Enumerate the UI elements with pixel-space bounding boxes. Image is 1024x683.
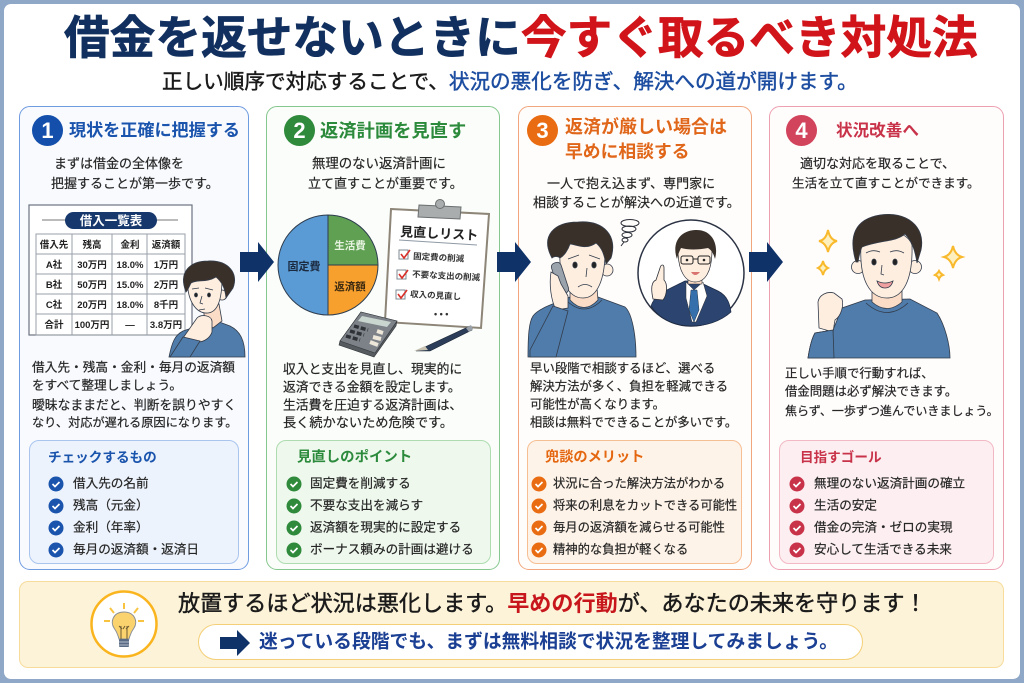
text: 返済できる金額を設定します。 — [283, 379, 461, 394]
step 4 goals — [779, 440, 994, 564]
text: 毎月の返済額を減らせる可能性 — [553, 521, 725, 535]
text: 無理のない返済計画の確立 — [814, 476, 965, 490]
table: borrowing list: — — [125, 320, 135, 331]
step 2 badge: 2 — [293, 118, 306, 143]
step 4 badge — [786, 115, 817, 146]
arrow: step 1 to 2 — [240, 242, 274, 282]
table: borrowing list: 18.0% — [117, 260, 144, 271]
text: 把握することが第一歩です。 — [51, 176, 219, 191]
text: 早めに相談する — [565, 141, 689, 161]
table: borrowing list: 借入一覧表 — [80, 213, 143, 228]
pen — [414, 325, 473, 351]
step 2 points — [276, 440, 491, 564]
text: 無理のない返済計画に — [312, 156, 446, 171]
table: borrowing list: 18.0% — [117, 300, 144, 311]
step 3 intro — [533, 176, 740, 210]
step 1 badge: 1 — [41, 118, 54, 143]
step 2 body — [283, 361, 462, 430]
text: 返済額を現実的に設定する — [310, 520, 461, 534]
table: borrowing list: 合計 — [44, 319, 64, 331]
icon: check marks step 2 — [286, 476, 302, 558]
person: worried man on the phone — [528, 222, 636, 357]
table: borrowing list: 1万円 — [154, 260, 178, 271]
text: 一人で抱え込まず、専門家に — [547, 176, 715, 191]
text: 生活の安定 — [814, 498, 877, 512]
text: 借入先・残高・金利・毎月の返済額 — [32, 360, 235, 374]
text: 可能性が高くなります。 — [530, 398, 665, 412]
banner message: 迷っている段階でも、まずは無料相談で状況を整理してみましょう。 — [259, 631, 838, 652]
clipboard: review list: • • • — [434, 309, 448, 319]
advisor circle — [638, 220, 744, 326]
step 1 intro — [51, 156, 219, 191]
pie chart: budget: 固定費 — [288, 259, 320, 273]
icon: check marks step 4 — [790, 476, 804, 558]
text: 将来の利息をカットできる可能性 — [553, 499, 737, 513]
table: borrowing list: 残高 — [82, 239, 102, 251]
text: 金利（年率） — [73, 520, 149, 534]
clipboard: review list: 固定費の削減 — [413, 251, 465, 264]
text: 相談することが解決への近道です。 — [533, 195, 740, 210]
pie chart: budget — [278, 215, 378, 315]
panel: step 2 — [266, 106, 500, 570]
calculator — [339, 312, 397, 357]
text: 固定費を削減する — [310, 476, 411, 490]
text: 残高（元金） — [73, 498, 149, 512]
step 4 goals title: 目指すゴール — [800, 450, 882, 465]
panel: step 4 — [769, 106, 1004, 570]
text: 適切な対応を取ることで、 — [800, 156, 955, 171]
icon: light bulb — [92, 592, 156, 656]
text: 安心して生活できる未来 — [814, 542, 952, 556]
text: ボーナス頼みの計画は避ける — [310, 542, 474, 556]
text: 収入と支出を見直し、現実的に — [283, 361, 462, 376]
text: 解決方法が多く、負担を軽減できる — [530, 380, 728, 394]
text: 状況に合った解決方法がわかる — [553, 477, 725, 491]
table: borrowing list: 返済額 — [152, 239, 181, 251]
text: 毎月の返済額・返済日 — [73, 542, 199, 556]
arrow: banner — [220, 630, 250, 656]
table: borrowing list: 3.8万円 — [150, 320, 182, 331]
text: 生活を立て直すことができます。 — [792, 176, 980, 190]
panel: step 1 — [19, 106, 249, 570]
panel: step 3 — [518, 106, 752, 570]
step 4 goals items — [814, 476, 965, 556]
text: 不要な支出を減らす — [310, 498, 423, 512]
table: borrowing list: A社 — [46, 259, 63, 271]
icon: check marks step 1 — [48, 476, 64, 558]
text: 曖昧なままだと、判断を誤りやすく — [32, 397, 236, 412]
banner headline: 放置するほど状況は悪化します。早めの行動が、あなたの未来を守ります！ — [178, 591, 927, 616]
clipboard: review list: 収入の見直し — [410, 289, 461, 302]
title: 借金を返せないときに今すぐ取るべき対処法 — [64, 13, 978, 64]
clipboard: review list: 不要な支出の削減 — [412, 269, 481, 283]
clipboard: review list: 見直しリスト — [400, 224, 479, 243]
text: 焦らず、一歩ずつ進んでいきましょう。 — [785, 404, 999, 418]
step 4 intro — [792, 156, 980, 190]
text: なり、対応が遅れる原因になります。 — [32, 416, 237, 430]
text: 長く続かないため危険です。 — [283, 415, 453, 430]
step 3 body — [530, 362, 737, 430]
step 3 merits — [527, 440, 742, 564]
text: 正しい手順で行動すれば、 — [785, 367, 934, 381]
arrow: step 3 to 4 — [749, 242, 783, 282]
table: borrowing list: 金利 — [120, 239, 140, 251]
step 3 merits items — [553, 476, 737, 557]
icon: stress spiral — [621, 220, 639, 246]
clipboard: review list — [385, 200, 489, 328]
step 1 checklist title: チェックするもの — [48, 450, 157, 465]
text: 精神的な負担が軽くなる — [553, 543, 688, 557]
table: borrowing list: 15.0% — [117, 280, 144, 291]
table: borrowing list: 100万円 — [75, 320, 109, 331]
arrow: step 2 to 3 — [497, 242, 531, 282]
table: borrowing list: B社 — [46, 279, 63, 291]
text: 早い段階で相談するほど、選べる — [530, 362, 715, 376]
bottom banner — [19, 581, 1004, 668]
step 2 intro — [308, 156, 463, 191]
table: borrowing list: 30万円 — [77, 260, 107, 271]
table: borrowing list: C社 — [46, 299, 63, 311]
person: happy man — [808, 214, 950, 358]
subtitle: 正しい順序で対応することで、状況の悪化を防ぎ、解決への道が開けます。 — [162, 71, 858, 94]
step 2 points items — [310, 476, 474, 556]
step 3 badge — [527, 115, 558, 146]
table: borrowing list: 50万円 — [77, 280, 107, 291]
step 2 heading: 返済計画を見直す — [320, 120, 466, 141]
step 2 points title: 見直しのポイント — [297, 449, 412, 465]
text: まずは借金の全体像を — [54, 156, 184, 171]
icon: sparkles — [818, 230, 962, 279]
step 3 merits title: 兜談のメリット — [545, 449, 644, 465]
step 4 badge: 4 — [795, 118, 808, 143]
step 4 body — [785, 366, 999, 418]
pie chart: budget: 生活費 — [334, 239, 366, 252]
text: 借入先の名前 — [73, 476, 149, 490]
text: 借金問題は必ず解決できます。 — [785, 385, 957, 399]
step 1 body — [32, 360, 237, 430]
text: 借金の完済・ゼロの実現 — [814, 520, 953, 534]
icon: check marks step 3 — [532, 476, 546, 558]
step 1 checklist — [29, 440, 239, 564]
text: 返済が厳しい場合は — [565, 117, 727, 137]
person: thinking man — [169, 261, 245, 357]
step 1 checklist items — [73, 476, 199, 556]
text: 生活費を圧迫する返済計画は、 — [283, 397, 462, 412]
banner pill — [198, 624, 863, 660]
step 4 heading: 状況改善へ — [836, 121, 919, 140]
table: borrowing list — [29, 205, 192, 335]
step 3 heading — [565, 117, 727, 161]
step 3 badge: 3 — [536, 118, 549, 143]
table: borrowing list: 8千円 — [154, 299, 178, 311]
step 2 badge — [284, 115, 315, 146]
step 1 badge — [32, 115, 63, 146]
pie chart: budget: 返済額 — [334, 280, 366, 293]
table: borrowing list: 2万円 — [154, 280, 178, 291]
table: borrowing list: 借入先 — [40, 239, 69, 251]
text: 立て直すことが重要です。 — [308, 176, 463, 191]
text: 相談は無料でできることが多いです。 — [530, 416, 737, 430]
step 1 heading: 現状を正確に把握する — [69, 121, 240, 140]
text: をすべて整理しましょう。 — [32, 378, 182, 392]
table: borrowing list: 20万円 — [77, 300, 107, 311]
